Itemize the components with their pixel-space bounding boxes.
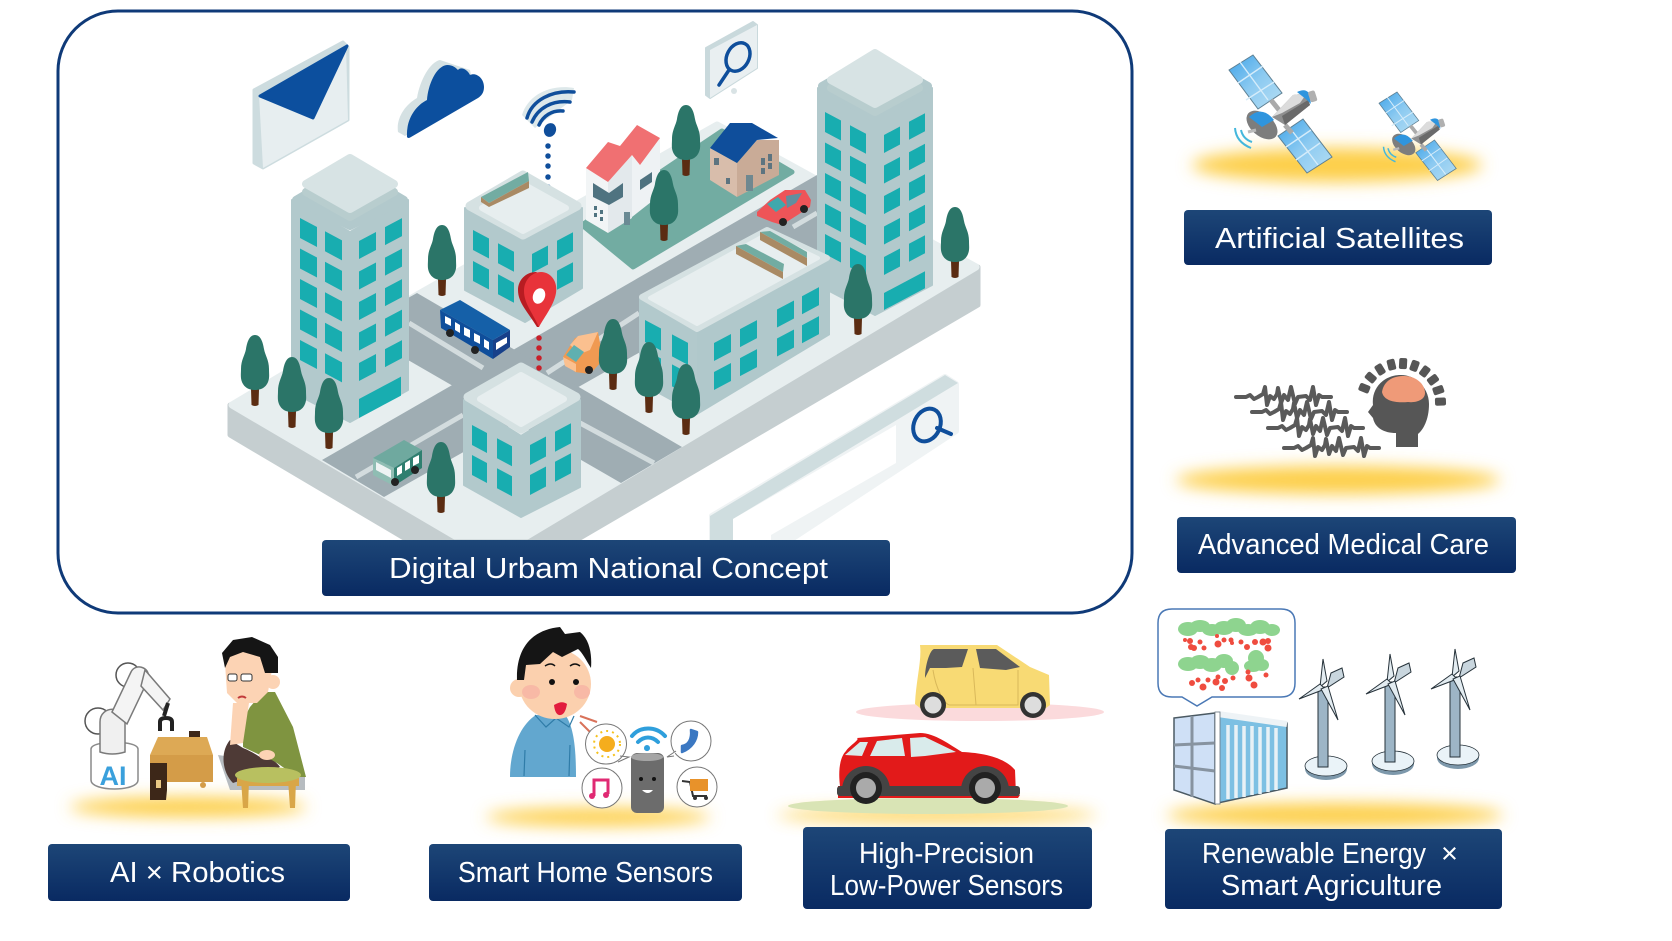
building with planter [465,172,582,322]
tree [599,319,627,390]
label: digital urbam national concept: Digital Urbam National Concept [389,553,828,585]
tree [672,364,700,435]
label: renewable energy smart agriculture: Smart Agriculture [1221,870,1442,902]
tree [427,442,455,513]
strawberry plants [1178,618,1280,691]
garden with houses [582,123,792,267]
tree [941,207,969,278]
panel: renewable energy smart agriculture [1158,609,1503,909]
label: smart home sensors: Smart Home Sensors [458,857,713,889]
icon: cloud [398,60,484,138]
label: advanced medical care: Advanced Medical Care [1198,529,1489,561]
illustration: red car [788,733,1068,814]
label: renewable energy smart agriculture: Renewable Energy [1202,838,1426,870]
illustration: speaking man [510,627,597,777]
building: front [464,367,580,517]
tree [315,378,343,449]
label: artificial satellites: Artificial Satellites [1215,223,1464,255]
illustration: shogi board [150,731,213,800]
wind turbine 3 [1431,649,1479,769]
house: red roof [586,125,660,233]
panel: high-precision low-power sensors [777,645,1104,909]
tree [672,105,700,176]
label: high-precision low-power sensors: High-Precision [859,838,1034,870]
label: ai robotics: AI × Robotics [110,857,285,889]
illustration: thinking man [218,637,306,808]
label: renewable energy smart agriculture [1165,829,1502,909]
icon: wifi [632,728,665,748]
icon: head with brain [1358,358,1446,447]
map pin [518,272,556,388]
panel: digital urban national concept [58,11,1132,613]
tree [635,342,663,413]
label: digital urbam national concept [322,540,890,596]
tower: right [818,53,932,315]
icon: small satellite [1379,92,1456,180]
label: high-precision low-power sensors: Low-Power Sensors [830,870,1063,902]
icon: phone bubble [667,721,711,761]
panel: advanced medical care [1176,358,1516,573]
search bar [710,375,958,540]
panel: ai robotics [48,637,350,901]
tree [241,335,269,406]
illustration: robot arm: AI [100,761,126,791]
tree [278,357,306,428]
strawberry callout [1158,609,1295,706]
label: ai robotics [48,844,350,901]
wind turbine 1 [1299,659,1347,780]
tree [844,264,872,335]
bus: green [373,440,422,486]
icon: magnifier sign [706,22,757,98]
shipping container farm [1174,712,1287,804]
house: blue roof [710,123,779,197]
icon: brain waves [1236,387,1379,456]
icon: wifi signal [522,87,574,197]
tree [428,225,456,296]
label: high-precision low-power sensors [803,827,1092,909]
illustration: robot arm [85,663,172,791]
illustration: smart speaker [631,753,664,813]
label: smart home sensors [429,844,742,901]
label: artificial satellites [1184,210,1492,265]
icon: cart bubble [677,767,717,807]
icon: envelope [254,42,348,168]
illustration: yellow car [856,645,1104,721]
icon: music bubble [582,768,622,808]
icon: sun bubble [586,724,629,764]
car: orange [563,332,603,374]
bus: blue [440,300,510,359]
panel: smart home sensors [429,627,742,901]
red car [757,190,811,226]
wind turbine 2 [1366,654,1414,775]
icon: large satellite [1229,55,1332,173]
building: wide with planters [639,230,830,415]
tower: left [292,158,408,422]
tree [650,170,678,241]
label: advanced medical care [1177,517,1516,573]
panel: artificial satellites [1184,55,1492,265]
isometric city base [230,125,978,538]
label: renewable energy smart agriculture: × [1441,838,1458,870]
